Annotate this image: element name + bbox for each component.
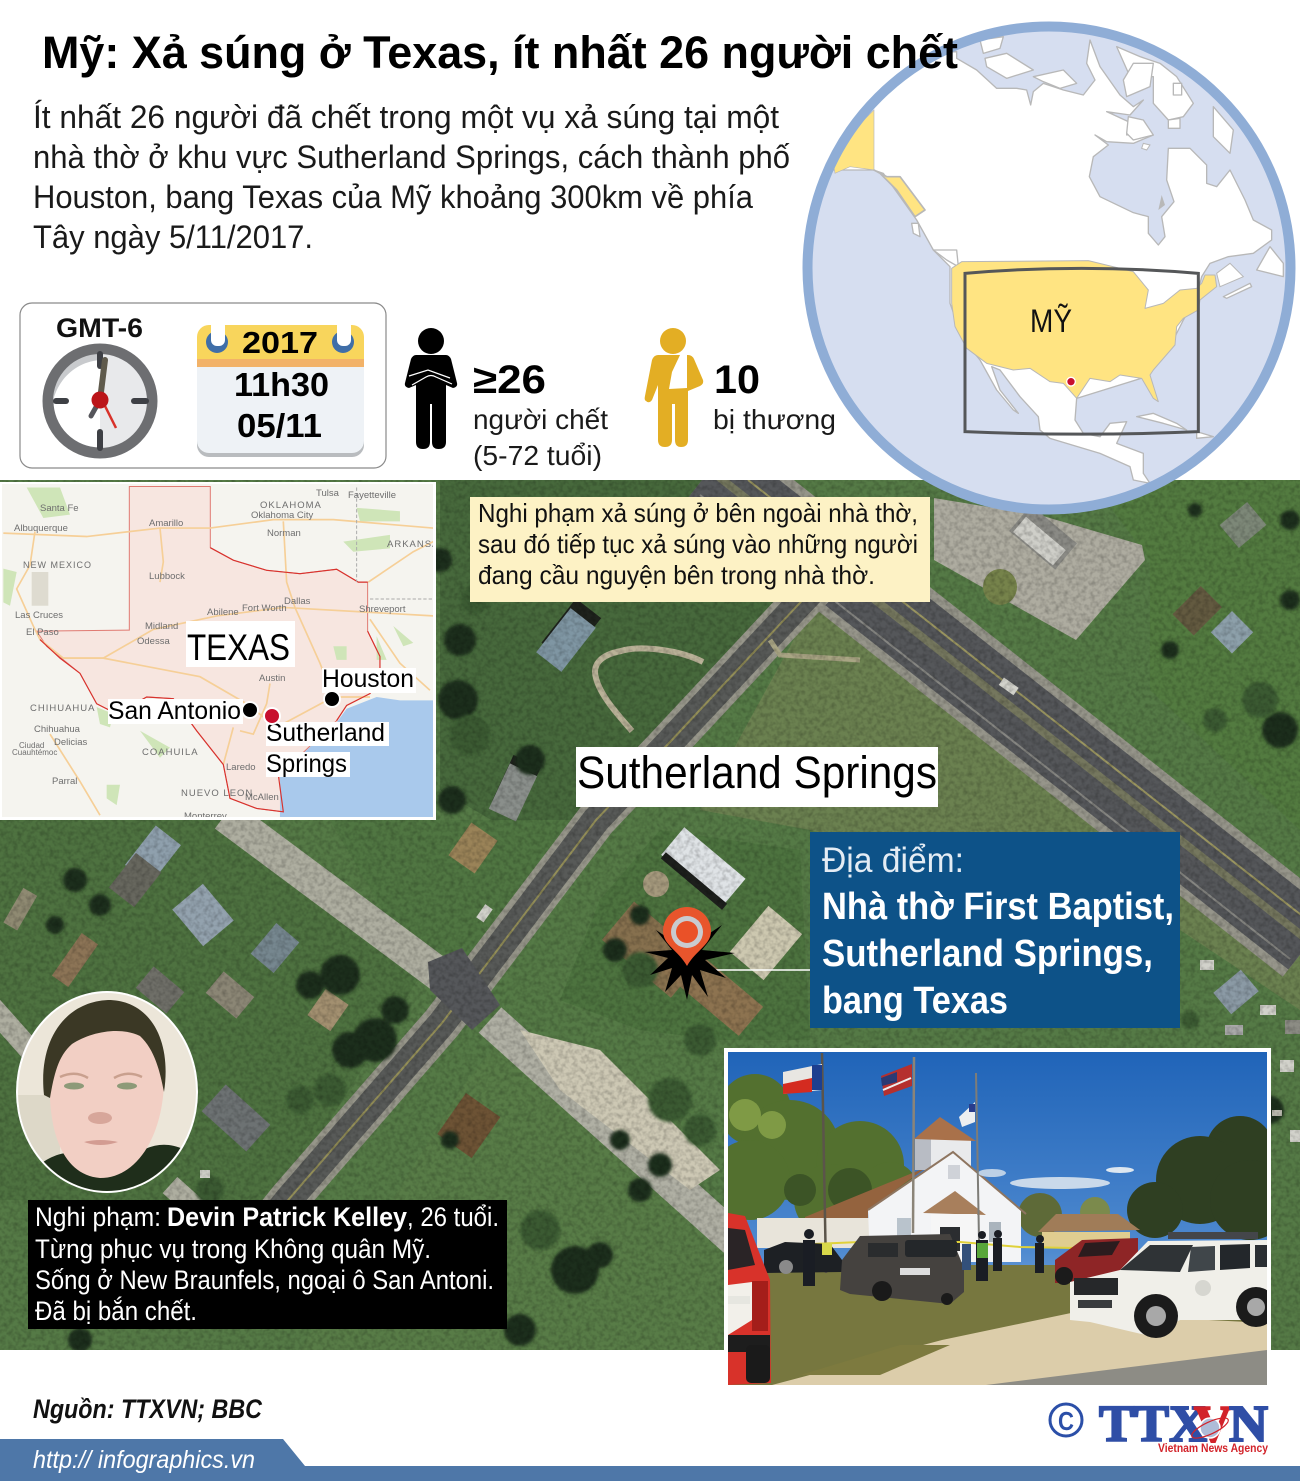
small map place names: Las Cruces <box>15 610 63 621</box>
eyes <box>64 1082 84 1090</box>
icon: calendar <box>197 320 364 457</box>
small map place names: Norman <box>267 528 301 539</box>
small map place names: Midland <box>145 621 178 632</box>
white SUV <box>1070 1240 1267 1336</box>
small map place names: Chihuahua <box>34 724 81 735</box>
small map place names: Amarillo <box>149 518 183 529</box>
small map place names <box>12 488 447 822</box>
Arctic islands <box>980 37 1233 153</box>
stat: deaths: người chết <box>473 404 608 435</box>
icon: copyright <box>1050 1404 1082 1436</box>
panel: suspect caption: Sống ở New Braunfels, ngoại ô San Antoni. <box>35 1265 494 1295</box>
neighbouring building <box>1038 1214 1140 1232</box>
parking lot <box>934 498 1145 640</box>
small map place names: Abilene <box>207 607 239 618</box>
right trees <box>1127 1116 1267 1240</box>
junk yard specks <box>200 678 1300 1178</box>
intro text: nhà thờ ở khu vực Sutherland Springs, cách thành phố <box>33 139 790 175</box>
logo: TTXVN: Vietnam News Agency <box>1158 1443 1269 1455</box>
label: Sutherland Springs <box>266 719 389 778</box>
leader line <box>715 969 811 971</box>
small map place names: Tulsa <box>316 488 340 499</box>
small map place names: Dallas <box>284 596 311 607</box>
red pickup <box>1055 1238 1138 1283</box>
hair <box>43 1000 166 1098</box>
small map place names: Santa Fe <box>40 503 79 514</box>
stat: deaths: (5-72 tuổi) <box>473 440 602 471</box>
logo: TTXVN: N <box>1229 1396 1268 1453</box>
houses and buildings <box>3 502 1266 1158</box>
small map place names: ARKANSAS <box>387 539 447 550</box>
intro text: Tây ngày 5/11/2017. <box>33 219 313 255</box>
small map place names: Fort Worth <box>242 603 287 614</box>
stat: injured: bị thương <box>713 404 836 435</box>
small map place names: Monterrey <box>184 811 227 822</box>
stat: deaths <box>473 358 608 471</box>
intro text <box>33 99 790 255</box>
small map place names: Oklahoma City <box>251 510 314 521</box>
logo: TTXVN <box>1099 1396 1269 1455</box>
panel: location box: Nhà thờ First Baptist, <box>822 886 1174 928</box>
inset frame <box>965 268 1198 434</box>
clouds <box>1010 1177 1110 1189</box>
main road <box>262 602 828 1200</box>
callout: yellow note: đang cầu nguyện bên trong nhà thờ. <box>478 560 875 590</box>
icon: calendar: 2017 <box>242 325 318 360</box>
grass <box>728 1265 1267 1385</box>
label: Sutherland Springs: Springs <box>266 750 347 778</box>
globe locator map <box>800 26 1290 510</box>
icon: dead person <box>405 328 457 449</box>
icon: calendar: 11h30 <box>234 366 329 403</box>
church wing <box>805 1170 923 1218</box>
small map place names: Delicias <box>54 737 88 748</box>
Gulf of Mexico <box>280 697 433 820</box>
small map place names: Cuauhtémoc <box>12 748 57 757</box>
panel: Texas inset map <box>0 482 447 822</box>
red truck <box>728 1213 771 1385</box>
face <box>50 1028 164 1178</box>
small map place names: Shreveport <box>359 604 406 615</box>
logo: TTXVN: TTX <box>1099 1396 1207 1453</box>
marker: San Antonio dot <box>242 702 258 718</box>
heading: GMT-6: GMT-6 <box>56 313 143 343</box>
Texas territory <box>37 487 380 812</box>
left trees <box>728 1074 915 1220</box>
marker: Houston dot <box>324 691 340 707</box>
small map place names: Laredo <box>226 762 256 773</box>
small map place names: COAHUILA <box>142 747 199 758</box>
local road <box>0 815 735 1240</box>
panel: time and date <box>20 303 386 468</box>
callout: yellow note: sau đó tiếp tục xả súng vào những người <box>478 529 918 559</box>
panel: suspect caption: Nghi phạm: <box>35 1202 161 1232</box>
footer bar <box>0 1439 1300 1481</box>
police tape <box>790 1242 1075 1248</box>
Atlantic Canada islands <box>912 223 1283 438</box>
label: Houston: Houston <box>322 665 414 693</box>
small map place names: Lubbock <box>149 571 185 582</box>
people <box>803 1229 1044 1286</box>
small map place names: Fayetteville <box>348 490 396 501</box>
small map place names: Odessa <box>137 636 170 647</box>
callout: yellow note <box>470 497 930 602</box>
label: Sutherland Springs: Sutherland Springs <box>577 747 937 798</box>
flag poles and flags <box>783 1053 979 1273</box>
shirt <box>44 1144 180 1191</box>
small map place names: OKLAHOMA <box>260 500 322 511</box>
church body <box>868 1152 1026 1262</box>
panel: location box <box>810 832 1180 1028</box>
panel: suspect caption: Đã bị bắn chết. <box>35 1295 197 1326</box>
label: TEXAS: TEXAS <box>187 627 290 668</box>
panel: suspect caption: , 26 tuổi. <box>407 1202 499 1232</box>
highway <box>700 470 1300 959</box>
intro text: Houston, bang Texas của Mỹ khoảng 300km về phía <box>33 179 753 215</box>
title: Mỹ: Xả súng ở Texas, ít nhất 26 người chết <box>42 27 958 78</box>
photo: suspect portrait <box>15 990 200 1195</box>
icon: calendar: 05/11 <box>237 407 322 444</box>
stat: injured: 10 <box>714 358 760 402</box>
small map place names: CHIHUAHUA <box>30 703 95 714</box>
icon: injured person <box>645 328 703 447</box>
panel: location box: bang Texas <box>822 980 1008 1022</box>
small map place names: Albuquerque <box>14 523 68 534</box>
small map place names: Austin <box>259 673 285 684</box>
label: San Antonio: San Antonio <box>108 697 241 725</box>
small map place names: Parral <box>52 776 77 787</box>
label: Sutherland Springs: Sutherland <box>266 719 385 747</box>
satellite map background <box>0 470 1300 1352</box>
panel: suspect caption: Devin Patrick Kelley <box>167 1202 407 1232</box>
panel: suspect caption <box>28 1200 507 1329</box>
logo: TTXVN: V <box>1194 1396 1232 1453</box>
contiguous United States <box>952 261 1217 402</box>
panel: suspect caption: Từng phục vụ trong Không quân Mỹ. <box>35 1234 431 1264</box>
small map place names: El Paso <box>26 627 59 638</box>
small map place names: NUEVO LEON <box>181 788 253 799</box>
panel: location box: Sutherland Springs, <box>822 933 1153 975</box>
small map place names: Ciudad <box>19 741 44 750</box>
label: MỸ: MỸ <box>1030 303 1072 339</box>
icon: clock <box>48 349 152 453</box>
nose and mouth <box>88 1112 112 1124</box>
stat: injured <box>713 358 836 435</box>
photo: church scene <box>710 1048 1290 1386</box>
North America land <box>800 40 1272 483</box>
callout: yellow note: Nghi phạm xả súng ở bên ngoài nhà thờ, <box>478 498 918 528</box>
footer link: http:// infographics.vn <box>33 1446 255 1474</box>
marker: Sutherland Springs dot <box>264 708 280 724</box>
black car <box>764 1242 842 1273</box>
intro text: Ít nhất 26 người đã chết trong một vụ xả súng tại một <box>33 99 779 135</box>
small map place names: McAllen <box>245 792 279 803</box>
church steeple <box>931 1140 971 1166</box>
small map place names: NEW MEXICO <box>23 560 92 570</box>
location dot <box>1067 377 1075 386</box>
icon: shooting location starburst and pin <box>645 907 735 1000</box>
panel: location box: Địa điểm: <box>822 841 964 880</box>
source: Nguồn: TTXVN; BBC <box>33 1394 262 1424</box>
Alaska <box>833 110 874 173</box>
icon: copyright: C <box>1058 1406 1074 1436</box>
tree clusters <box>46 503 1300 1352</box>
stat: deaths: ≥26 <box>473 358 546 402</box>
dark van <box>840 1234 964 1304</box>
